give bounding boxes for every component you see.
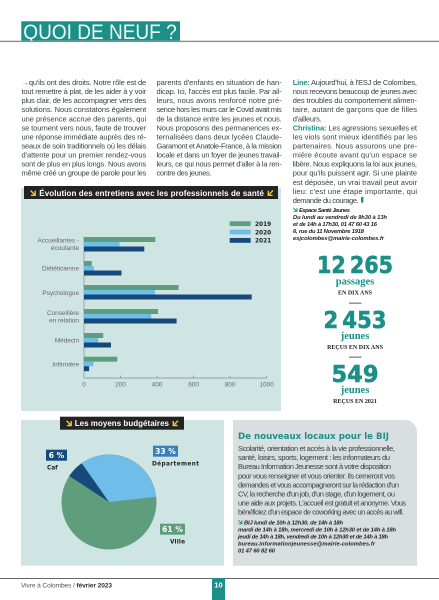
stat: 549 jeunes: jeunes [340,385,369,396]
stat: 549 jeunes [332,362,378,405]
text column 1 [22,78,147,178]
text column 3: Christina: Les agressions sexuelles et [293,123,418,132]
chart axes [84,237,267,378]
heading: De nouveaux locaux pour le BIJ [238,432,389,442]
legend: 2019 [255,222,271,228]
text column 1: sont de plus en plus longs. Nous avons [22,160,146,169]
legend: 2021 [255,239,271,245]
text column 2: contre des jeunes. [156,169,212,178]
legend: 2020 [255,230,271,236]
stat: 2 453 jeunes: REÇUS EN DIX ANS [327,345,384,351]
text column 1: même créé un groupe de parole pour les [22,169,146,178]
text column 2: de la distance entre les jeunes et nous. [156,114,282,123]
stat: 12 265 passages [317,253,393,297]
title: QUOI DE NEUF ? [23,20,177,44]
label: Caf: 6 % [49,451,65,460]
category labels: en relation [49,318,79,324]
contact: Espace Santé Jeunes: 6, rue du 11 Novembre 1918 [293,229,365,235]
text column 3: demande du courage. [293,196,359,205]
contact: BIJ: bureau.informationjeunesse@mairie-colombes.fr [238,542,376,548]
legend [230,221,271,245]
text column 2: sence hors les murs car le Covid avait mis [156,105,282,114]
label: Caf: Caf [47,466,58,472]
contact: Espace Santé Jeunes: Espace Santé Jeunes [299,208,351,214]
label: Département: 33 % [155,447,176,456]
bars: Infirmière [84,357,117,371]
text column 1: seaux de soin traditionnels où les délais [22,141,146,150]
x axis labels: 200 [115,382,126,388]
bars: Psychologue [84,285,252,300]
heading: évolution des entretiens: Évolution des entretiens avec les professionnels de santé [39,189,265,198]
body text [238,444,406,517]
bars: Médecin [84,333,111,348]
text column 3: d'ailleurs. [293,114,322,123]
text column 2: Nous proposons des permanences ex- [156,123,282,132]
text column 2: leurs, ce qui nous permet d'aller à la ren- [156,160,282,169]
text column 3: pour qu'ils puissent agir. Si une plainte [293,169,417,178]
stat: 2 453 jeunes [324,308,386,351]
label: Département: Département [152,461,199,468]
bars: Conseillère [84,309,177,324]
stat: 2 453 jeunes: jeunes [340,331,369,342]
bars: Accueillantes [84,237,155,252]
page number [212,578,225,600]
x axis labels: 1000 [260,382,274,388]
bars: Diététicienne [84,261,122,276]
category labels: Accueillantes - [37,238,79,244]
text column 3 [293,78,418,205]
panel: pie chart [21,417,224,566]
category labels: Conseillère [47,310,79,317]
text column 2: dicap. Ici, l'accès est plus facile. Par ail- [156,87,282,96]
text column 2: Garamont et Anatole-France, à la mission [156,141,282,150]
pie [62,454,156,550]
body text: santé, loisirs, sports, logement : les informateurs du [238,453,390,462]
text column 2: ternalisées dans deux lycées Claude- [156,132,282,141]
footer credit: Vivre à Colombes / février 2023 [21,583,112,590]
text column 3: partenaires. Nous assurons une pre- [293,141,418,150]
text column 2 [156,78,282,178]
text column 1: →qu'ils ont des droits. Notre rôle est de [22,78,146,87]
label: Département [152,446,199,468]
contact: Espace Santé Jeunes: esjcolombes@mairie-colombes.fr [293,236,385,242]
text column 3: nous recevons beaucoup de jeunes avec [293,87,417,96]
text column 1: une présence accrue des parents, qui [22,114,147,123]
text column 1: solutions. Nous constatons également [22,105,147,114]
heading: moyens budgétaires: Les moyens budgétaires [75,419,170,428]
contact: BIJ: 01 47 60 82 60 [238,549,276,555]
body text: Bureau Information Jeunesse sont à votre disposition [238,462,391,471]
text column 3: les viols sont mieux identifiés par les [293,132,417,141]
text column 2: leurs, nous avons renforcé notre pré- [156,96,282,105]
text column 3: libère. Nous expliquons la loi aux jeunes, [293,160,417,169]
stat: 12 265 passages: EN DIX ANS [338,291,373,297]
panel: De nouveaux locaux pour le BIJ [233,420,417,566]
text column 3: taire, autant de garçons que de filles [293,105,417,114]
category labels [37,238,79,368]
contact: BIJ [237,520,396,555]
category labels: Infirmière [52,362,79,368]
x axis labels: 400 [152,382,163,388]
x axis labels: 800 [225,382,236,388]
body text: pour vous renseigner et vous orienter. Ils cerneront vos [238,471,395,480]
text column 3: lieu: c'est une étape importante, qui [293,187,417,196]
stat: 549 jeunes: 549 [332,362,378,388]
stat: 549 jeunes: REÇUS EN 2021 [333,399,377,405]
body text: bénéficiez d'un espace de coworking avec un accès au wifi. [238,508,404,517]
body text: CV, la recherche d'un job, d'un stage, d'un logement, ou [238,490,395,498]
text column 1: plus clair, de les accompagner vers des [22,96,146,105]
contact: BIJ: mardi de 14h à 18h, mercredi de 10h à 12h30 et de 14h à 18h [238,527,396,533]
label: Caf [46,450,67,472]
text column 1: une réponse immédiate auprès des ré- [22,132,147,141]
category labels: Diététicienne [42,266,79,272]
contact: BIJ: jeudi de 14h à 18h, vendredi de 10h à 12h30 et de 14h à 18h [237,534,388,540]
stat: 2 453 jeunes: 2 453 [324,308,386,334]
category labels: Psychologue [42,290,79,297]
contact: Espace Santé Jeunes: Du lundi au vendredi de 9h30 à 13h [293,215,387,221]
x axis labels: 0 [82,382,86,388]
text column 2: locale et dans un foyer de jeunes travail- [156,151,282,160]
text column 3: des troubles du comportement alimen- [293,96,418,105]
text column 1: tout remettre à plat, de les aider à y voir [22,87,147,96]
body text: Scolarité, orientation et accès à la vie professionnelle, [238,444,395,453]
body text: une aide aux projets. L'accueil est gratuit et anonyme. Vous [238,499,406,508]
text column 2: parents d'enfants en situation de han- [156,78,282,87]
label: Ville: 61 % [162,525,183,534]
label: Ville: Ville [170,540,185,546]
panel: bar chart [21,186,281,411]
body text: demandes et vous accompagneront sur la rédaction d'un [238,480,399,489]
stat: 12 265 passages: passages [336,277,374,288]
text column 1: d'attente pour un premier rendez-vous [22,151,146,160]
contact: Espace Santé Jeunes [293,208,387,242]
heading: moyens budgétaires [60,417,184,430]
text column 3: est déposée, un vrai travail peut avoir [293,178,418,187]
text column 3: Line: Aujourd'hui, à l'ESJ de Colombes, [293,78,417,87]
page number: 10 [214,581,223,590]
category labels: écoutante [51,245,79,252]
label: Ville [160,524,185,546]
x axis labels: 600 [188,382,199,388]
contact: BIJ: BIJ lundi de 10h à 12h30, de 14h à 18h [244,520,343,526]
heading: évolution des entretiens [24,186,278,199]
category labels: Médecin [55,338,79,344]
stat: 12 265 passages: 12 265 [317,253,393,279]
contact: Espace Santé Jeunes: et de 14h à 17h30, 01 47 60 43 16 [293,222,378,228]
text column 3: mière écoute avant qu'un espace se [293,151,417,160]
text column 1: se tournent vers nous, faute de trouver [22,123,147,132]
x axis labels [82,382,274,388]
